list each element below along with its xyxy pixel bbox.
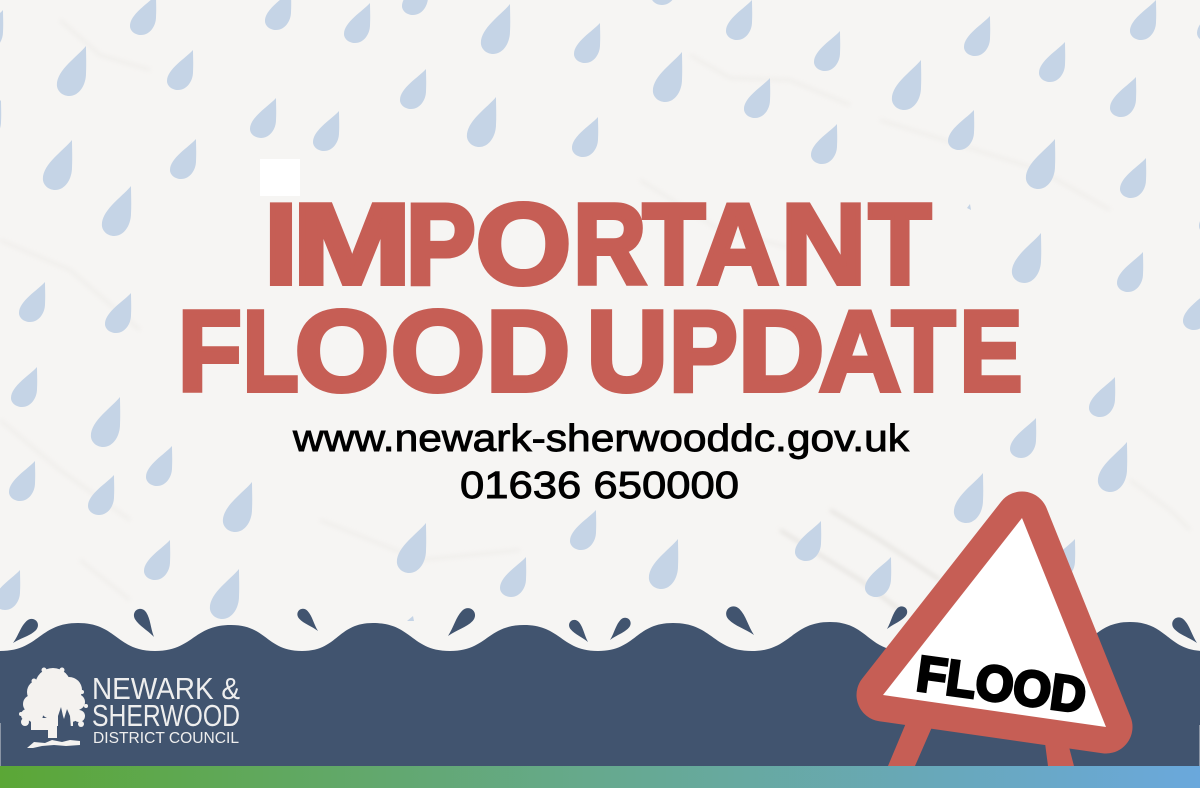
title line 2: D bbox=[486, 288, 570, 416]
flood warning sign bbox=[883, 518, 1106, 766]
title line 2: D bbox=[738, 288, 824, 416]
website address: www.newark-sherwooddc.gov.uk bbox=[292, 418, 910, 460]
council logo bbox=[19, 668, 240, 748]
sign: white panel bbox=[883, 518, 1106, 727]
title line 1: A bbox=[697, 180, 779, 308]
title line 2: A bbox=[819, 288, 901, 416]
title line 1: N bbox=[781, 180, 866, 308]
logo: tree icon bbox=[19, 668, 88, 748]
title line 2: L bbox=[243, 288, 299, 416]
rain drops bbox=[0, 0, 1200, 621]
title line 1: T bbox=[869, 180, 931, 308]
title line 1: P bbox=[406, 180, 476, 308]
title line 2: T bbox=[892, 288, 955, 416]
title line 1: R bbox=[573, 180, 646, 308]
title line 2: U bbox=[587, 288, 668, 416]
water waves bbox=[0, 622, 1200, 766]
white square patch bbox=[260, 159, 300, 196]
phone number: 01636 650000 bbox=[460, 465, 739, 507]
title line 2: F bbox=[178, 288, 242, 416]
title line 1: M bbox=[293, 180, 411, 308]
title line 2: P bbox=[669, 288, 738, 416]
logo: wordmark: NEWARK & bbox=[92, 671, 240, 706]
sign: red triangle frame bbox=[883, 518, 1106, 727]
title line 2: E bbox=[960, 288, 1022, 416]
logo: wordmark bbox=[92, 671, 240, 747]
title line 2: O bbox=[295, 288, 389, 416]
logo: wordmark: SHERWOOD bbox=[92, 698, 240, 733]
title line 2: O bbox=[391, 288, 485, 416]
title line 1: I bbox=[265, 180, 297, 308]
logo: wordmark: DISTRICT COUNCIL bbox=[93, 730, 239, 747]
title line 1: T bbox=[643, 180, 705, 308]
edge slivers bbox=[0, 723, 1200, 766]
water splashes bbox=[8, 603, 1200, 648]
title bbox=[178, 180, 1022, 416]
gradient footer bar bbox=[0, 766, 1200, 788]
sign: legs bbox=[888, 723, 1074, 766]
title line 1: O bbox=[476, 180, 571, 308]
sign: flood label: FLOOD bbox=[914, 645, 1090, 724]
